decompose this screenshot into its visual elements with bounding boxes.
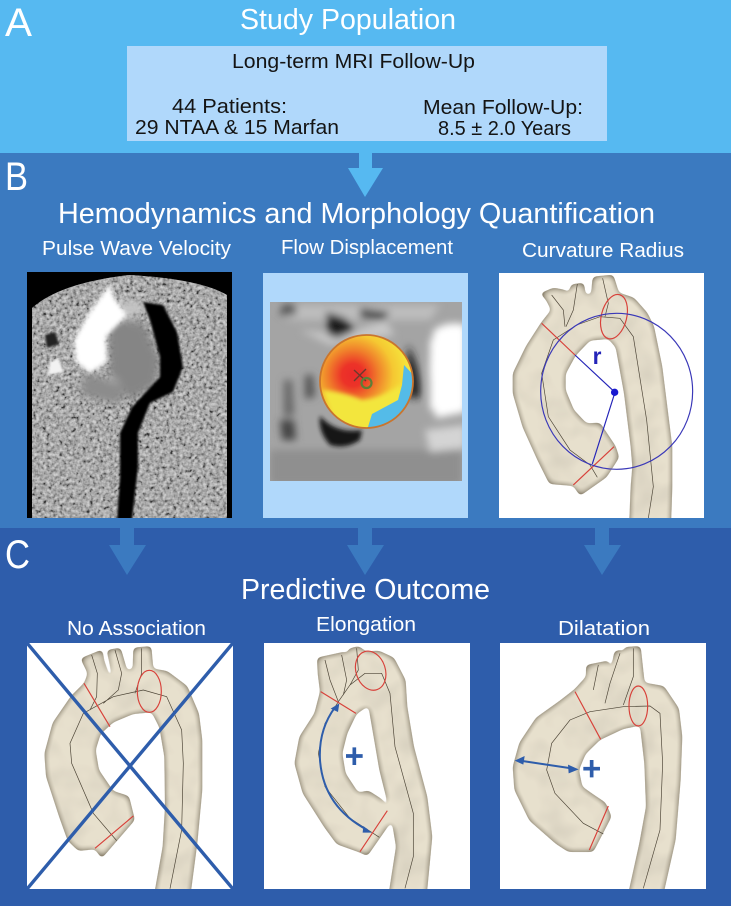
aorta surface: [44, 646, 202, 906]
arrow: curvature radius to outcome: [584, 528, 621, 575]
panel letter A: A: [5, 1, 32, 45]
panel letter C: C: [5, 533, 30, 577]
aorta surface: [513, 275, 672, 537]
marker: cross: [354, 369, 366, 381]
arrow: section A to B: [348, 153, 383, 197]
red measurement planes: [84, 683, 133, 848]
radius label r: r: [593, 343, 602, 369]
plus sign: [583, 760, 600, 777]
panel: elongation aorta: [264, 643, 470, 906]
red measurement planes: [321, 692, 387, 852]
length arrow: [320, 707, 367, 830]
text: mean follow-up: [423, 97, 583, 140]
section A background: [0, 0, 731, 153]
arrow: flow displacement to outcome: [347, 528, 384, 575]
radius lines: [575, 355, 615, 464]
section B background: [0, 153, 731, 528]
section C background: [0, 528, 731, 906]
panel: no association aorta: [27, 643, 233, 906]
text: patient count: 44 Patients:: [172, 96, 287, 118]
marker: circle: [362, 378, 372, 388]
label: Pulse Wave Velocity: Pulse Wave Velocity: [42, 238, 231, 260]
image: aorta with curvature radius: [499, 273, 704, 537]
label: Dilatation: Dilatation: [558, 618, 650, 640]
aorta surface: [513, 646, 682, 906]
text: mean follow-up: 8.5 ± 2.0 Years: [438, 118, 571, 140]
heading: Hemodynamics and Morphology Quantification: Hemodynamics and Morphology Quantification: [58, 198, 655, 230]
heading: Study Population: Study Population: [240, 4, 456, 36]
plus sign: [346, 747, 363, 765]
panel: study population details: [127, 46, 607, 141]
text: patient count: 29 NTAA & 15 Marfan: [135, 117, 339, 139]
aorta surface: [294, 646, 432, 906]
diameter arrow: [520, 761, 573, 769]
image: phase-contrast MRI for pulse wave velocity: [27, 272, 232, 520]
red measurement planes: [542, 323, 614, 485]
label: Curvature Radius: Curvature Radius: [522, 240, 684, 262]
label: Elongation: Elongation: [316, 614, 416, 636]
panel: dilatation aorta: [500, 643, 706, 906]
red measurement planes: [575, 692, 608, 850]
label: No Association: No Association: [67, 618, 206, 640]
label: Flow Displacement: Flow Displacement: [281, 237, 453, 259]
heading: Predictive Outcome: Predictive Outcome: [241, 574, 490, 606]
curvature circle: [541, 313, 693, 469]
arrow: pulse wave velocity to outcome: [109, 528, 146, 575]
text: follow-up title: Long-term MRI Follow-Up: [232, 51, 475, 73]
cross-out lines: [27, 643, 233, 889]
image: flow displacement map: [263, 273, 468, 518]
text: mean follow-up: Mean Follow-Up:: [423, 97, 583, 119]
text: patient count: [135, 96, 339, 139]
panel letter B: B: [5, 155, 28, 199]
